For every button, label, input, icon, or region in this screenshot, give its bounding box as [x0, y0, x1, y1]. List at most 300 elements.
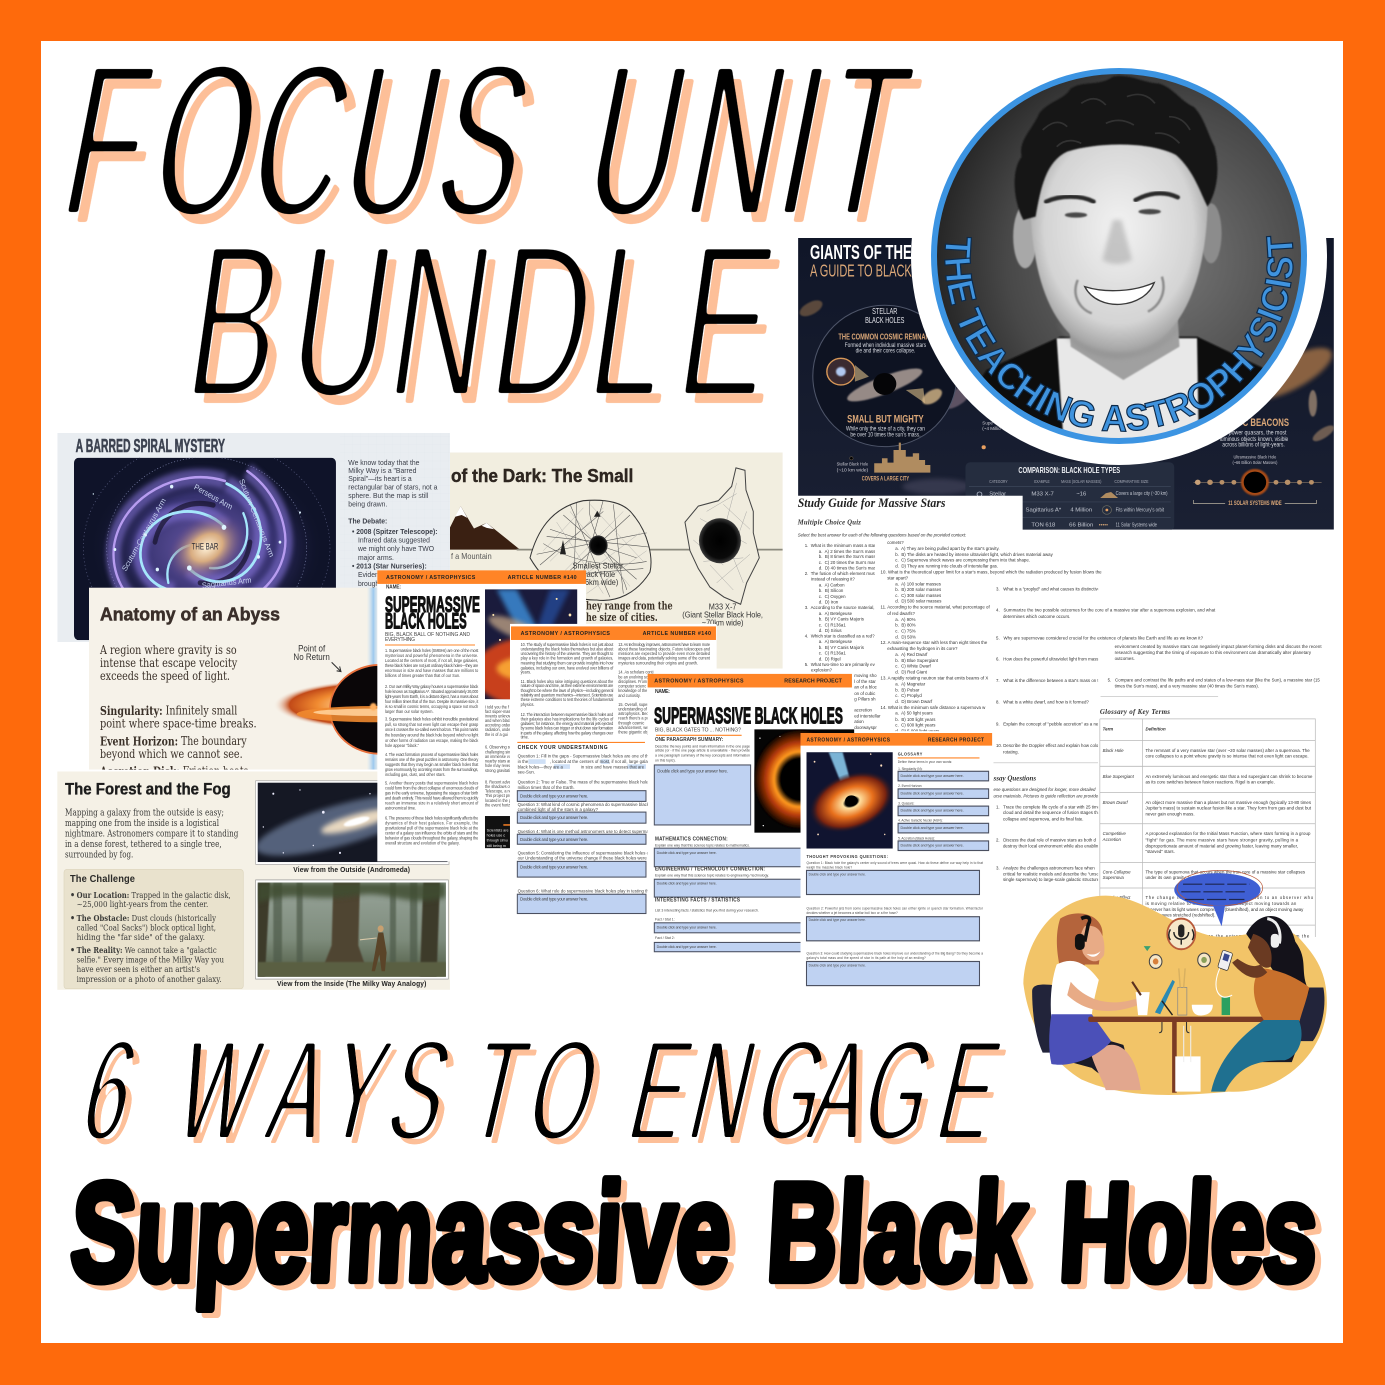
article body: 12. The interaction between supermassive black holes and: [521, 712, 613, 717]
text: debate: [348, 457, 438, 588]
stellar black holes section: THE COMMON COSMIC REMNANT: [838, 333, 933, 341]
article body: 2. Our own Milky Way galaxy houses a supermassive black: [385, 684, 478, 689]
text: debate: sphere. But the map is still: [348, 491, 429, 500]
callout: point of no return: [293, 643, 341, 672]
article body: four million times that of the Sun. Despite its massive size, it: [385, 699, 479, 704]
photo: Andromeda: View from the Outside (Andromeda): [293, 867, 410, 874]
box: the challenge: have ever seen is either an artist's: [77, 964, 200, 974]
orange header: RESEARCH PROJECT: [784, 678, 843, 685]
glossary table: Supernova: [1103, 875, 1124, 880]
quiz column 2: a. A) Red Dwarf: [895, 652, 928, 657]
side column text: the shadows of: [485, 784, 512, 789]
cut-off text snippets: [854, 673, 881, 730]
comparison table: [965, 462, 1174, 531]
quiz column 2: a. A) They are being pulled apart by the star's gravity.: [895, 546, 1000, 551]
interesting facts section: Double click and type your answer here.: [657, 925, 717, 930]
cut-off text snippets: ation: [854, 719, 864, 724]
article body: reach an immense size in a relatively short amount of: [385, 801, 479, 806]
article title: BIG, BLACK BALL OF NOTHING AND: [385, 632, 470, 638]
label: smallest stellar black hole: Smallest Stellar: [573, 561, 624, 571]
text: debate: Milky Way is a "Barred: [348, 466, 416, 475]
article title: SUPERMASSIVE: [385, 593, 480, 617]
heading: Select the best answer for each of the following questions based on the provided context:: [798, 533, 967, 538]
stellar black holes section: Stellar Black Hole: [837, 462, 869, 467]
box: the challenge: hiding the "far side" of the galaxy.: [77, 932, 205, 942]
comparison table: ~16: [1076, 492, 1086, 498]
box: the challenge: The Challenge: [70, 874, 135, 885]
glossary table: [1100, 707, 1315, 938]
panel: Anatomy of an Abyss: [89, 588, 378, 770]
glossary form: 2. Event Horizon:: [898, 784, 922, 788]
quiz: check your understanding: Question 3: What kind of cosmic phenomena do supermassive black holes: [518, 802, 661, 807]
quiz column 2: b. B) 200 solar masses: [895, 587, 942, 592]
glossary table: "starved" stars.: [1145, 849, 1175, 854]
panel: A Barred Spiral Mystery: [57, 433, 450, 655]
thought provoking questions: Question 2: Powerful jets from some supermassive black holes can either ignite or quench star formation. What factor: [806, 906, 984, 910]
quiz column 1: 5. What two-time to are primarily ev: [805, 662, 875, 667]
glossary form: 5. Accretion (Black Holes):: [898, 836, 935, 840]
article body: galaxies, including our own, have evolved over billions of: [521, 665, 614, 670]
cut-off text snippets: ed interstellar: [854, 713, 881, 718]
short answer column: single supernova) to large-scale galactic structure: [1003, 877, 1100, 882]
quiz: check your understanding: Question 4: What is one method astronomers use to detect supermassive black: [518, 829, 671, 834]
stellar black holes section: be over 10 times the sun's mass.: [850, 432, 921, 438]
box: the challenge: •: [70, 912, 75, 923]
quiz column 1: d. D) 40 times the Sun's mass: [819, 565, 879, 571]
box: the challenge: The Reality: We cannot take a "galactic: [77, 945, 217, 955]
panel: Giants of the Universe infographic: (~4 Millio: [982, 426, 1001, 431]
panel: article page 1: NAME:: [386, 585, 401, 591]
short answer column: 2. Discuss the dual role of massive stars as both d: [996, 838, 1096, 843]
long questions crossing the page: 5. Why are supernovae considered crucial for the existence of planets like Earth and life as we know it?: [996, 635, 1203, 640]
long questions crossing the page: [996, 608, 1330, 697]
quiz: check your understanding: CHECK YOUR UNDERSTANDING: [518, 745, 608, 751]
cut-off text snippets: moving sho: [854, 673, 877, 678]
text: debate: Infrared data suggested: [358, 535, 430, 545]
glossary form: Define these terms in your own words:: [898, 760, 952, 764]
short answer column: 10. Describe the Doppler effect and explain how color: [996, 743, 1100, 748]
article body: 10. The study of supermassive black holes is not just about: [521, 642, 614, 647]
quiz column 2: d. D) They are running into clouds of interstellar gas.: [895, 564, 998, 569]
article body: in parts of the galaxy, affecting how the galaxy changes over: [521, 730, 614, 735]
quiz column 2: 11. According to the source material, what percentage of: [881, 605, 990, 610]
short answer column: 7. What is the difference between a star's mass on the: [996, 678, 1104, 683]
connections section: [654, 836, 852, 897]
quiz column 2: c. C) 300 solar masses: [895, 593, 942, 598]
short answer column: urse materials. Pictures to guide reflection are provided: [994, 794, 1101, 799]
callout: point of no return: No Return: [293, 652, 330, 662]
short answer column: 3. Analyze the challenges astronomers face when: [996, 866, 1095, 871]
galaxy map: Sagittarius Arm: [202, 575, 252, 590]
orange header: [801, 733, 992, 746]
headline: Supermassive Black Holes: Black: [770, 1160, 1037, 1315]
article body: by some black holes can trigger or shut down star formation: [521, 726, 613, 731]
headline: Supermassive Black Holes: Holes: [1062, 1160, 1326, 1315]
text: debate: rectangular bar of stars, not a: [348, 482, 437, 492]
quiz column 2: c. C) Supernova shock waves are compressing them into that shape.: [895, 557, 1030, 563]
article body: dynamics of their host galaxies. For example, the: [385, 820, 479, 825]
article body: nature of space and time, as their extreme environments are: [521, 683, 614, 688]
quiz column 2: exhausting the hydrogen in its core?: [887, 646, 958, 651]
mountain: [450, 506, 520, 561]
glossary table: Brown Dwarf: [1103, 800, 1128, 805]
quiz column 2: b. B) Blue Supergiant: [895, 658, 939, 663]
glossary table: is moving relative to the wave source; an object moving towards an: [1145, 901, 1297, 906]
side column text: strong gravitati: [485, 768, 510, 773]
quiz column 2: c. C) 75%: [895, 628, 916, 633]
text: they range: hey range from the: [586, 599, 673, 613]
quiz: check your understanding: our Understanding of the universe change if these black holes were somehow: [518, 855, 667, 860]
article body: could form from the direct collapse of enormous clouds of: [385, 786, 479, 791]
quiz column 1: c. C) Oxygen: [819, 594, 846, 599]
side column text: fact super-mass: [485, 709, 512, 714]
quiz column 1: b. B) 8 times the Sun's mass: [819, 554, 876, 559]
orange header: ARTICLE NUMBER #140: [508, 575, 577, 581]
short answer column: collapse and supernova, and its final fate.: [1003, 816, 1084, 821]
summary section: article (or - if the one page article is unavailable - then provide: [655, 749, 750, 753]
galaxy map: [74, 458, 336, 640]
glossary table: "fight" for gas. The more massive stars have stronger gravity, pulling in a: [1145, 837, 1299, 842]
box: the challenge: called "Coal Sacks") block optical light,: [77, 922, 216, 933]
comparison table: 4 Million: [1070, 507, 1092, 513]
quiz column 1: 2. The fusion of which element must: [805, 571, 877, 576]
quiz column 1: 1. What is the minimum mass a star: [805, 543, 876, 548]
quiz column 1: a. A) Betelgeuse: [819, 611, 853, 616]
quiz: check your understanding: see-Sun.: [518, 769, 535, 774]
summary section: on this topic).: [655, 759, 676, 763]
glossary form: 3. Quasars:: [898, 801, 914, 806]
heading: Study Guide for Massive Stars: [798, 495, 946, 510]
stellar black holes section: Formed when individual massive stars: [845, 342, 926, 349]
glossary table: under its own gravity, creating a powerful explosion.: [1145, 875, 1246, 880]
title: FOCUS UNIT: FOCUS UNIT: [57, 28, 936, 272]
table: [1088, 1017, 1267, 1093]
glossary table: Accretion: [1102, 837, 1121, 842]
portrait photo: [937, 74, 1301, 438]
quiz column 1: b. B) Silicon: [819, 588, 844, 593]
article body: through cosmic: [618, 720, 644, 725]
glossary table: Black Hole: [1103, 748, 1124, 753]
box: the challenge: •: [70, 889, 75, 900]
cut-off text snippets: l of the star: [854, 679, 876, 684]
quiz column 1: d. D) Sirius: [819, 628, 842, 633]
thought provoking questions: decides whether a jet becomes a stellar boil box or a fire hose?: [806, 911, 898, 915]
quiz column 2: a. A) 90%: [895, 617, 915, 622]
connections section: ENGINEERING / TECHNOLOGY CONNECTION:: [655, 866, 765, 873]
article body: [521, 642, 711, 740]
headline: Supermassive Black Holes: Holes: [1056, 1155, 1320, 1310]
yellow blob background: [1023, 896, 1327, 1095]
side column text: I told you the f: [485, 705, 510, 710]
panel: The Forest and the Fog: [57, 772, 450, 990]
definition text: A region where gravity is so: [99, 643, 237, 657]
side column text: an immense vol: [485, 754, 512, 759]
article title: [385, 593, 480, 645]
galaxy map: Scutum-Centaurus Arm: [120, 496, 168, 573]
stellar black holes section: (~10 km wide): [837, 468, 869, 473]
photo: Andromeda: [251, 781, 449, 874]
heading: of the Dark: The Small: [451, 465, 633, 486]
title: BUNDLE: BUNDLE: [175, 198, 788, 443]
heading: Anatomy of an Abyss: [100, 604, 280, 625]
quiz column 2: 10. What is the theoretical upper limit for a star's mass, beyond which the radiation produced by fusion blows the: [881, 569, 1102, 575]
quiz: check your understanding: Question 2: True or False. The mass of the supermassive black hole at the center: [518, 780, 674, 785]
article body: 4. The exact formation process of supermassive black holes: [385, 752, 478, 757]
headline: Supermassive Black Holes: Supermassive: [67, 1155, 735, 1310]
article body: these extreme conditions to test theories of fundamental: [521, 697, 613, 702]
article title: BLACK HOLES: [385, 609, 467, 634]
quiz: check your understanding: Double click and type your answer here.: [520, 896, 588, 901]
intro text: mapping one from the inside is a logistical: [65, 818, 219, 828]
article body: or other forms of radiation can escape, making the black: [385, 738, 478, 743]
glossary table: never gain enough mass.: [1145, 812, 1195, 817]
subtitle: 6 WAYS TO ENGAGE: 6 WAYS TO ENGAGE: [76, 1016, 1019, 1176]
black hole diagram: [276, 588, 378, 770]
supermassive note: Supe: [982, 421, 993, 426]
article body: 6. The presence of these black holes significantly affects the: [385, 815, 479, 820]
thought provoking questions: Double click and type your answer here.: [809, 873, 866, 877]
article body: astronomical time.: [385, 806, 416, 811]
panel: research project page 1: NAME:: [655, 689, 670, 695]
title: BUNDLE: BUNDLE: [184, 208, 797, 453]
connections section: Explain one way that this science topic relates to engineering / technology.: [655, 874, 769, 878]
side column text: radiation, under: [485, 727, 512, 732]
quiz column 2: c. C) 600 light years: [895, 722, 936, 728]
map of Paris: [530, 500, 651, 600]
article body: remains one of the great puzzles in astronomy. One theory: [385, 757, 478, 762]
text: debate: The Debate:: [348, 516, 387, 526]
white ring around the badge: [911, 49, 1327, 465]
quiz column 2: b. B) 100 light years: [895, 717, 936, 722]
article body: including gas, dust, and other stars.: [385, 772, 445, 777]
text: debate: we might only have TWO: [357, 544, 434, 553]
long questions crossing the page: research suggesting that the timing of exposure to this environment can dramatically alter planetary: [1115, 650, 1312, 655]
fact box: [485, 816, 510, 848]
definition text: exceeds the speed of light.: [100, 670, 230, 683]
subtitle: 6 WAYS TO ENGAGE: 6 WAYS TO ENGAGE: [70, 1010, 1013, 1170]
fact box: Scientists are: [487, 829, 509, 833]
glossary form: Double click and type your answer here.: [901, 774, 964, 778]
image: black hole ring: [753, 729, 854, 833]
cut-off text snippets: accretion: [854, 707, 872, 713]
glossary table: Blue Supergiant: [1103, 774, 1134, 779]
stellar black holes section: SMALL BUT MIGHTY: [847, 413, 924, 425]
glossary table: Jupiter's mass) to sustain nuclear fusion like a star. They form from gas and dust but: [1145, 805, 1312, 811]
quiz: check your understanding: Double click and type your answer here.: [520, 864, 588, 869]
glossary table: observer has its light waves compressed (blueshifted), and an object moving away: [1145, 907, 1304, 912]
panel: research project page 2: [801, 733, 992, 988]
quiz column 2: d. D) 50%: [895, 634, 916, 640]
comparison table: Sagittarius A*: [1026, 507, 1062, 513]
fact box: holes use c: [487, 834, 505, 838]
thought provoking questions: weigh the massive black hole?: [806, 865, 852, 869]
orange header: ASTRONOMY / ASTROPHYSICS: [654, 678, 744, 685]
article body: play a key role in the formation and growth of galaxies,: [521, 656, 613, 661]
cut-off text snippets: an of a bloc: [854, 684, 878, 690]
thought provoking questions: Question 1: Black hole the galaxy's center only sound of trees were quasi. How do these define our way help in to that: [806, 861, 983, 865]
side column text: the event horizo: [485, 802, 513, 808]
article body: advancement, we: [618, 725, 649, 730]
article body: meaning that studying them can provide insights into how: [521, 660, 613, 665]
ultramassive section: 11 SOLAR SYSTEMS WIDE: [1228, 500, 1282, 507]
glossary table: The type of supernova that occurs when the iron core of a massive star collapses: [1145, 869, 1306, 875]
quiz column 1: instead of releasing it?: [811, 577, 855, 582]
glossary form: Double click and type your answer here.: [901, 791, 964, 796]
stellar black holes section: [813, 305, 957, 483]
long questions crossing the page: outcomes.: [1115, 656, 1135, 661]
article body: [385, 648, 479, 845]
article body: is so small in cosmic terms, occupying a space not much: [385, 704, 478, 709]
glossary form: Double click and type your answer here.: [901, 809, 964, 813]
quiz: check your understanding: black holes—they are a in size and have masses that are: [518, 764, 645, 769]
comparison table: MASS (SOLAR MASSES): [1061, 479, 1102, 484]
panel: Out of the Dark, the small: [450, 452, 783, 669]
orange header: [511, 626, 716, 640]
callout: point of no return: Point of: [298, 643, 326, 654]
orange header: ASTRONOMY / ASTROPHYSICS: [386, 575, 476, 581]
summary section: ONE PARAGRAPH SUMMARY:: [655, 737, 724, 743]
article body: their galaxies also has implications for the life cycles of: [521, 716, 614, 721]
quiz column 1: d. D) Rigel: [819, 656, 841, 661]
interesting facts section: [654, 897, 852, 952]
article body: the boundary around the black hole beyond which no light: [385, 732, 479, 738]
label: M33 X-7: [682, 602, 763, 627]
article body: light-years from Earth, it is a distant object, has a mass about: [385, 694, 479, 699]
quiz column 2: b. B) 80%: [895, 622, 916, 628]
cut-off text snippets: doorwayspr: [854, 725, 877, 730]
comparison table: COMPARISON: BLACK HOLE TYPES: [1018, 465, 1120, 475]
main heading: GIANTS OF THE: [810, 241, 912, 264]
short answer column: 8. What is a white dwarf, and how is it formed?: [996, 699, 1089, 705]
text: debate: Spiral"—its heart is a: [348, 474, 412, 483]
box: the challenge: •: [70, 945, 75, 955]
quiz column 1: c. C) R136a1: [819, 650, 846, 656]
comparison table: CATEGORY: [989, 479, 1008, 484]
stellar black holes section: COVERS A LARGE CITY: [862, 476, 909, 483]
definition text: beyond which we cannot see.: [100, 747, 243, 761]
glossary table: Competitive: [1103, 831, 1126, 836]
article body: 3. Supermassive black holes exhibit incredible gravitational: [385, 716, 478, 721]
article body: computer scienc: [618, 683, 646, 689]
definition text: point where space-time breaks.: [100, 717, 257, 731]
quiz column 1: a. A) 2 times the Sun's mass: [819, 549, 876, 554]
glossary table: disproportionate amount of material and growing faster, leaving many smaller,: [1145, 843, 1298, 849]
intro text: surrounded by fog.: [65, 849, 133, 860]
thought provoking questions: Question 3: How could studying supermassive black holes improve our understanding of the Big Bang? Do they become a: [806, 951, 983, 956]
title: FOCUS UNIT: FOCUS UNIT: [48, 18, 927, 262]
article body: uncovering the history of the universe. They are thought to: [521, 651, 614, 656]
quiz column 2: 12. A main-sequence star with less than eight times the: [881, 640, 988, 645]
comparison table: M33 X-7: [1031, 492, 1054, 498]
quiz column 2: a. A) Magnetar: [895, 681, 926, 687]
side column text: 8. Recent advan: [485, 779, 513, 784]
cut-off text snippets: on of cubic: [854, 691, 876, 696]
quiz column 2: of red dwarfs?: [887, 611, 915, 616]
quiz column 2: d. D) 5,000 light years: [895, 728, 940, 733]
project title: BIG, BLACK GATES TO ... NOTHING?: [655, 728, 741, 734]
comparison table: •••••: [1099, 523, 1108, 529]
interesting facts section: Double click and type your answer here.: [657, 945, 717, 949]
connections section: Double click and type your answer here.: [657, 881, 717, 886]
main heading: A GUIDE TO BLACK: [810, 261, 912, 280]
stellar black holes section: die and their cores collapse.: [856, 348, 915, 354]
comparison table: Fits within Mercury's orbit: [1116, 507, 1165, 513]
label: smallest stellar black hole: [573, 561, 624, 587]
comparison table: Stellar: [989, 491, 1006, 497]
short answer column: ssay Questions: [993, 773, 1036, 782]
side column text: nearby stars and: [485, 758, 514, 764]
article body: overall structure and evolution of the galaxy.: [385, 840, 460, 845]
article body: billions of times greater than that of our Sun.: [385, 673, 460, 678]
quiz column 2: d. D) Brown Dwarf: [895, 699, 933, 704]
side column text: hole may reveal: [485, 763, 512, 768]
article body: Located at the centers of most, if not all, large galaxies,: [385, 658, 478, 663]
short answer column: [994, 587, 1098, 882]
comparison table: 11 Solar Systems wide: [1116, 523, 1157, 529]
article body: galaxies; for instance, the energy and material jets ejected: [521, 721, 613, 726]
orange header: [648, 674, 852, 687]
galaxy map: Perseus Arm: [193, 482, 234, 512]
interesting facts section: INTERESTING FACTS / STATISTICS: [655, 897, 741, 904]
quiz: check your understanding: combined light of all the stars in a galaxy?: [518, 807, 598, 812]
ultramassive section: (~66 Billion Solar Masses): [1232, 460, 1278, 466]
project title: [654, 703, 843, 735]
fact box: through simu: [487, 839, 508, 843]
panel: Study Guide for Massive Stars: [797, 495, 1330, 938]
stellar black holes section: While only the size of a city, they can: [846, 426, 925, 432]
text: they range: he size of cities.: [586, 611, 658, 624]
article body: gas in the early universe, bypassing the stages of star birth: [385, 791, 478, 796]
article title: EVERYTHING: [385, 637, 415, 643]
summary section: a one paragraph summary of the key concepts and information: [655, 754, 750, 758]
article body: 15. Overall, super: [618, 702, 649, 707]
thought provoking questions: galaxy's total mass and the speed of star in its path at the holy of an ending?: [806, 956, 926, 960]
quiz column 1: c. C) 20 times the Sun's mass: [819, 560, 879, 565]
definition text: intense that escape velocity: [100, 657, 238, 670]
quiz: check your understanding: Question 5: Considering the influence of supermassive black holes on galaxies: [518, 850, 669, 855]
quiz column 1: c. C) R136a1: [819, 622, 846, 627]
side column text: challenging sin: [485, 749, 510, 754]
project title: SUPERMASSIVE BLACK HOLES: [654, 703, 843, 729]
text: debate: Evidence: [358, 570, 386, 579]
article body: physics.: [521, 702, 534, 707]
interesting facts section: List 3 interesting facts / statistics that you find during your research.: [655, 909, 759, 913]
glossary table: The change in frequency of a wave in relation to an observer who: [1145, 895, 1314, 900]
quiz column 2: comets?: [887, 540, 904, 545]
side column text: accreting order: [485, 722, 511, 728]
short answer column: ese questions are designed for longer, more detailed: [994, 787, 1096, 792]
short answer column: critical for realistic models and describe the "unsolved: [1003, 871, 1107, 876]
side column text: located in the g: [485, 798, 511, 803]
quiz column 2: c. C) Proplyd: [895, 693, 922, 698]
article body: once it crosses the so-called event horizon. This point marks: [385, 727, 478, 732]
text: debate: major arms.: [358, 553, 394, 562]
text: debate: • 2013 (Star Nurseries):: [352, 561, 427, 571]
comparison table: TON 618: [1031, 523, 1055, 529]
glossary form: [898, 751, 989, 851]
main heading: [810, 245, 912, 276]
orange header: ARTICLE NUMBER #140: [643, 631, 711, 637]
article body: relativity and quantum mechanics—intersect. Scientists use: [521, 692, 614, 698]
intro text: [65, 807, 239, 860]
short answer column: destroy their local environment while also enabling: [1003, 843, 1101, 849]
glossary table: as its core switches between fusion reactions. Rigel is an example.: [1145, 779, 1275, 785]
image: accretion disk art: [806, 752, 893, 849]
comparison table: Covers a large city (~30 km): [1116, 491, 1168, 497]
short answer column: 6. How does the powerful ultraviolet light from massive stars: [996, 656, 1116, 661]
stellar black holes section: BLACK HOLES: [865, 316, 905, 325]
heading: Multiple Choice Quiz: [797, 518, 861, 527]
